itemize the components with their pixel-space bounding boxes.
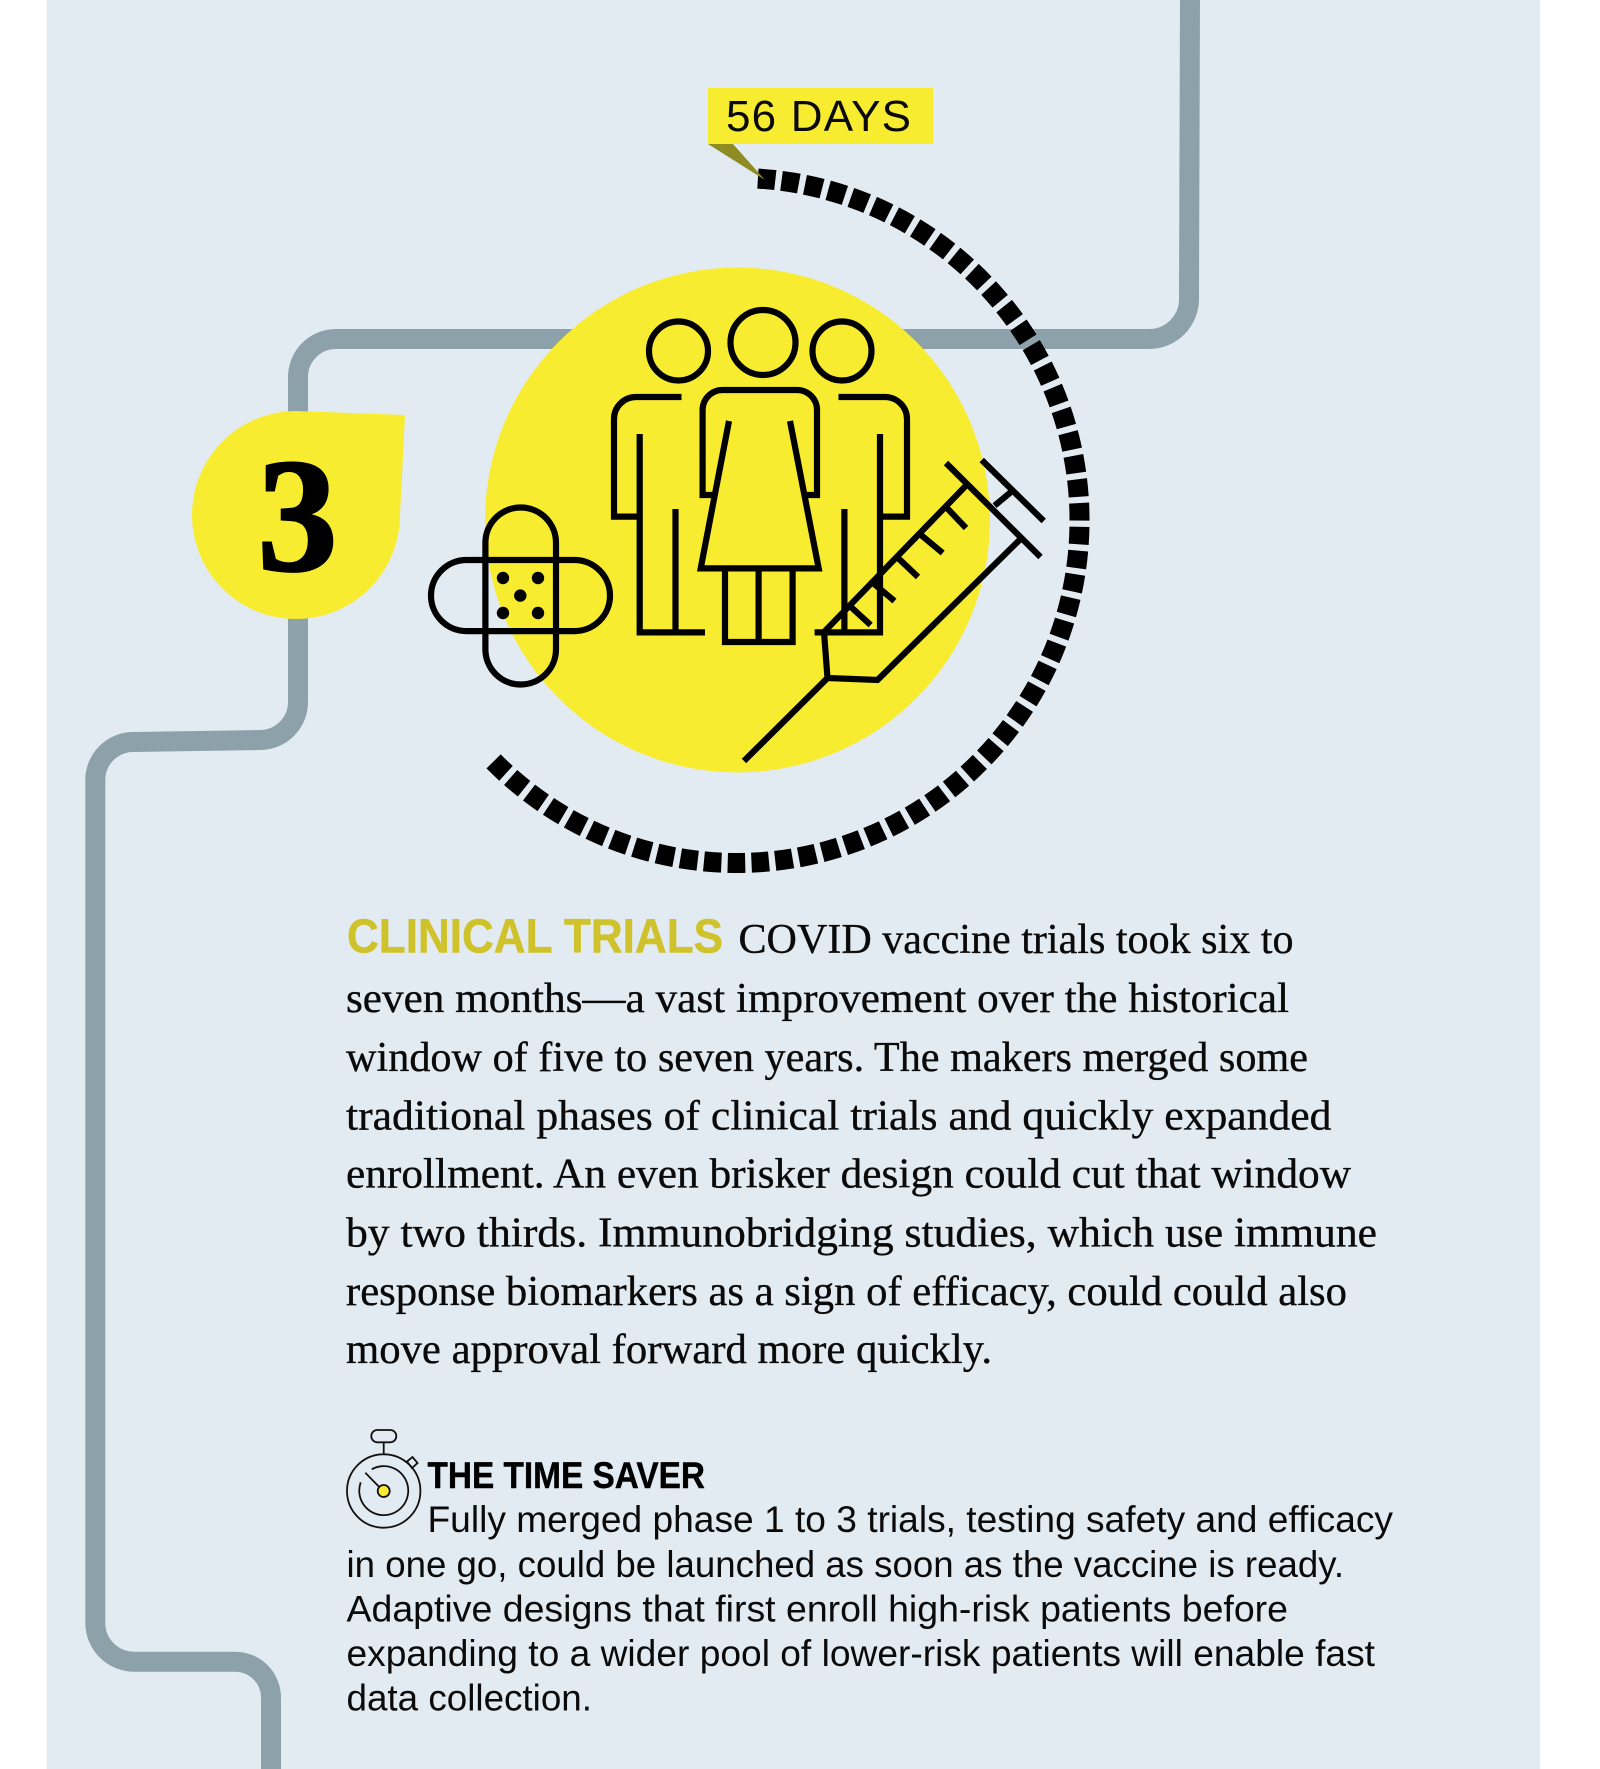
body text: clinical trials: COVID vaccine trials took six to [738,917,1294,963]
yellow circle behind icons [485,268,990,772]
body text: clinical trials [346,917,1377,1373]
middle person [701,310,819,642]
body text: clinical trials: move approval forward more quickly. [346,1327,992,1373]
body text: the time saver: Fully merged phase 1 to 3 trials, testing safety and efficacy [428,1499,1393,1540]
body text: clinical trials: window of five to seven years. The makers merged some [346,1035,1308,1081]
body text: clinical trials: traditional phases of clinical trials and quickly expanded [346,1094,1332,1140]
body text: the time saver: data collection. [346,1678,592,1718]
body text: clinical trials: response biomarkers as a sign of efficacy, could could also [346,1269,1347,1315]
timeline pipe [95,0,1190,1769]
body text: the time saver [346,1499,1393,1718]
body text: the time saver: Adaptive designs that first enroll high-risk patients before [346,1588,1288,1630]
dashed arc: 56 days [494,179,1080,863]
icon: syringe [744,460,1044,761]
right person [812,322,907,632]
body text: clinical trials: enrollment. An even brisker design could cut that window [346,1152,1352,1198]
icon: adhesive bandage [431,508,610,684]
icon: group of three people [614,310,907,642]
callout: 56 days [708,88,933,180]
body text: the time saver: in one go, could be launched as soon as the vaccine is ready. [346,1544,1344,1585]
body text: clinical trials: by two thirds. Immunobridging studies, which use immune [346,1210,1377,1256]
heading: the time saver: THE TIME SAVER [428,1455,705,1496]
callout: 56 days: 56 DAYS [726,92,911,141]
body text: the time saver: expanding to a wider pool of lower-risk patients will enable fast [346,1633,1376,1674]
heading: clinical trials: CLINICAL TRIALS [347,910,723,963]
left person [614,322,708,632]
step number badge: 3 [258,427,338,606]
body text: clinical trials: seven months—a vast improvement over the historical [346,976,1289,1022]
icon: stopwatch [347,1430,420,1528]
step number badge [192,411,405,619]
